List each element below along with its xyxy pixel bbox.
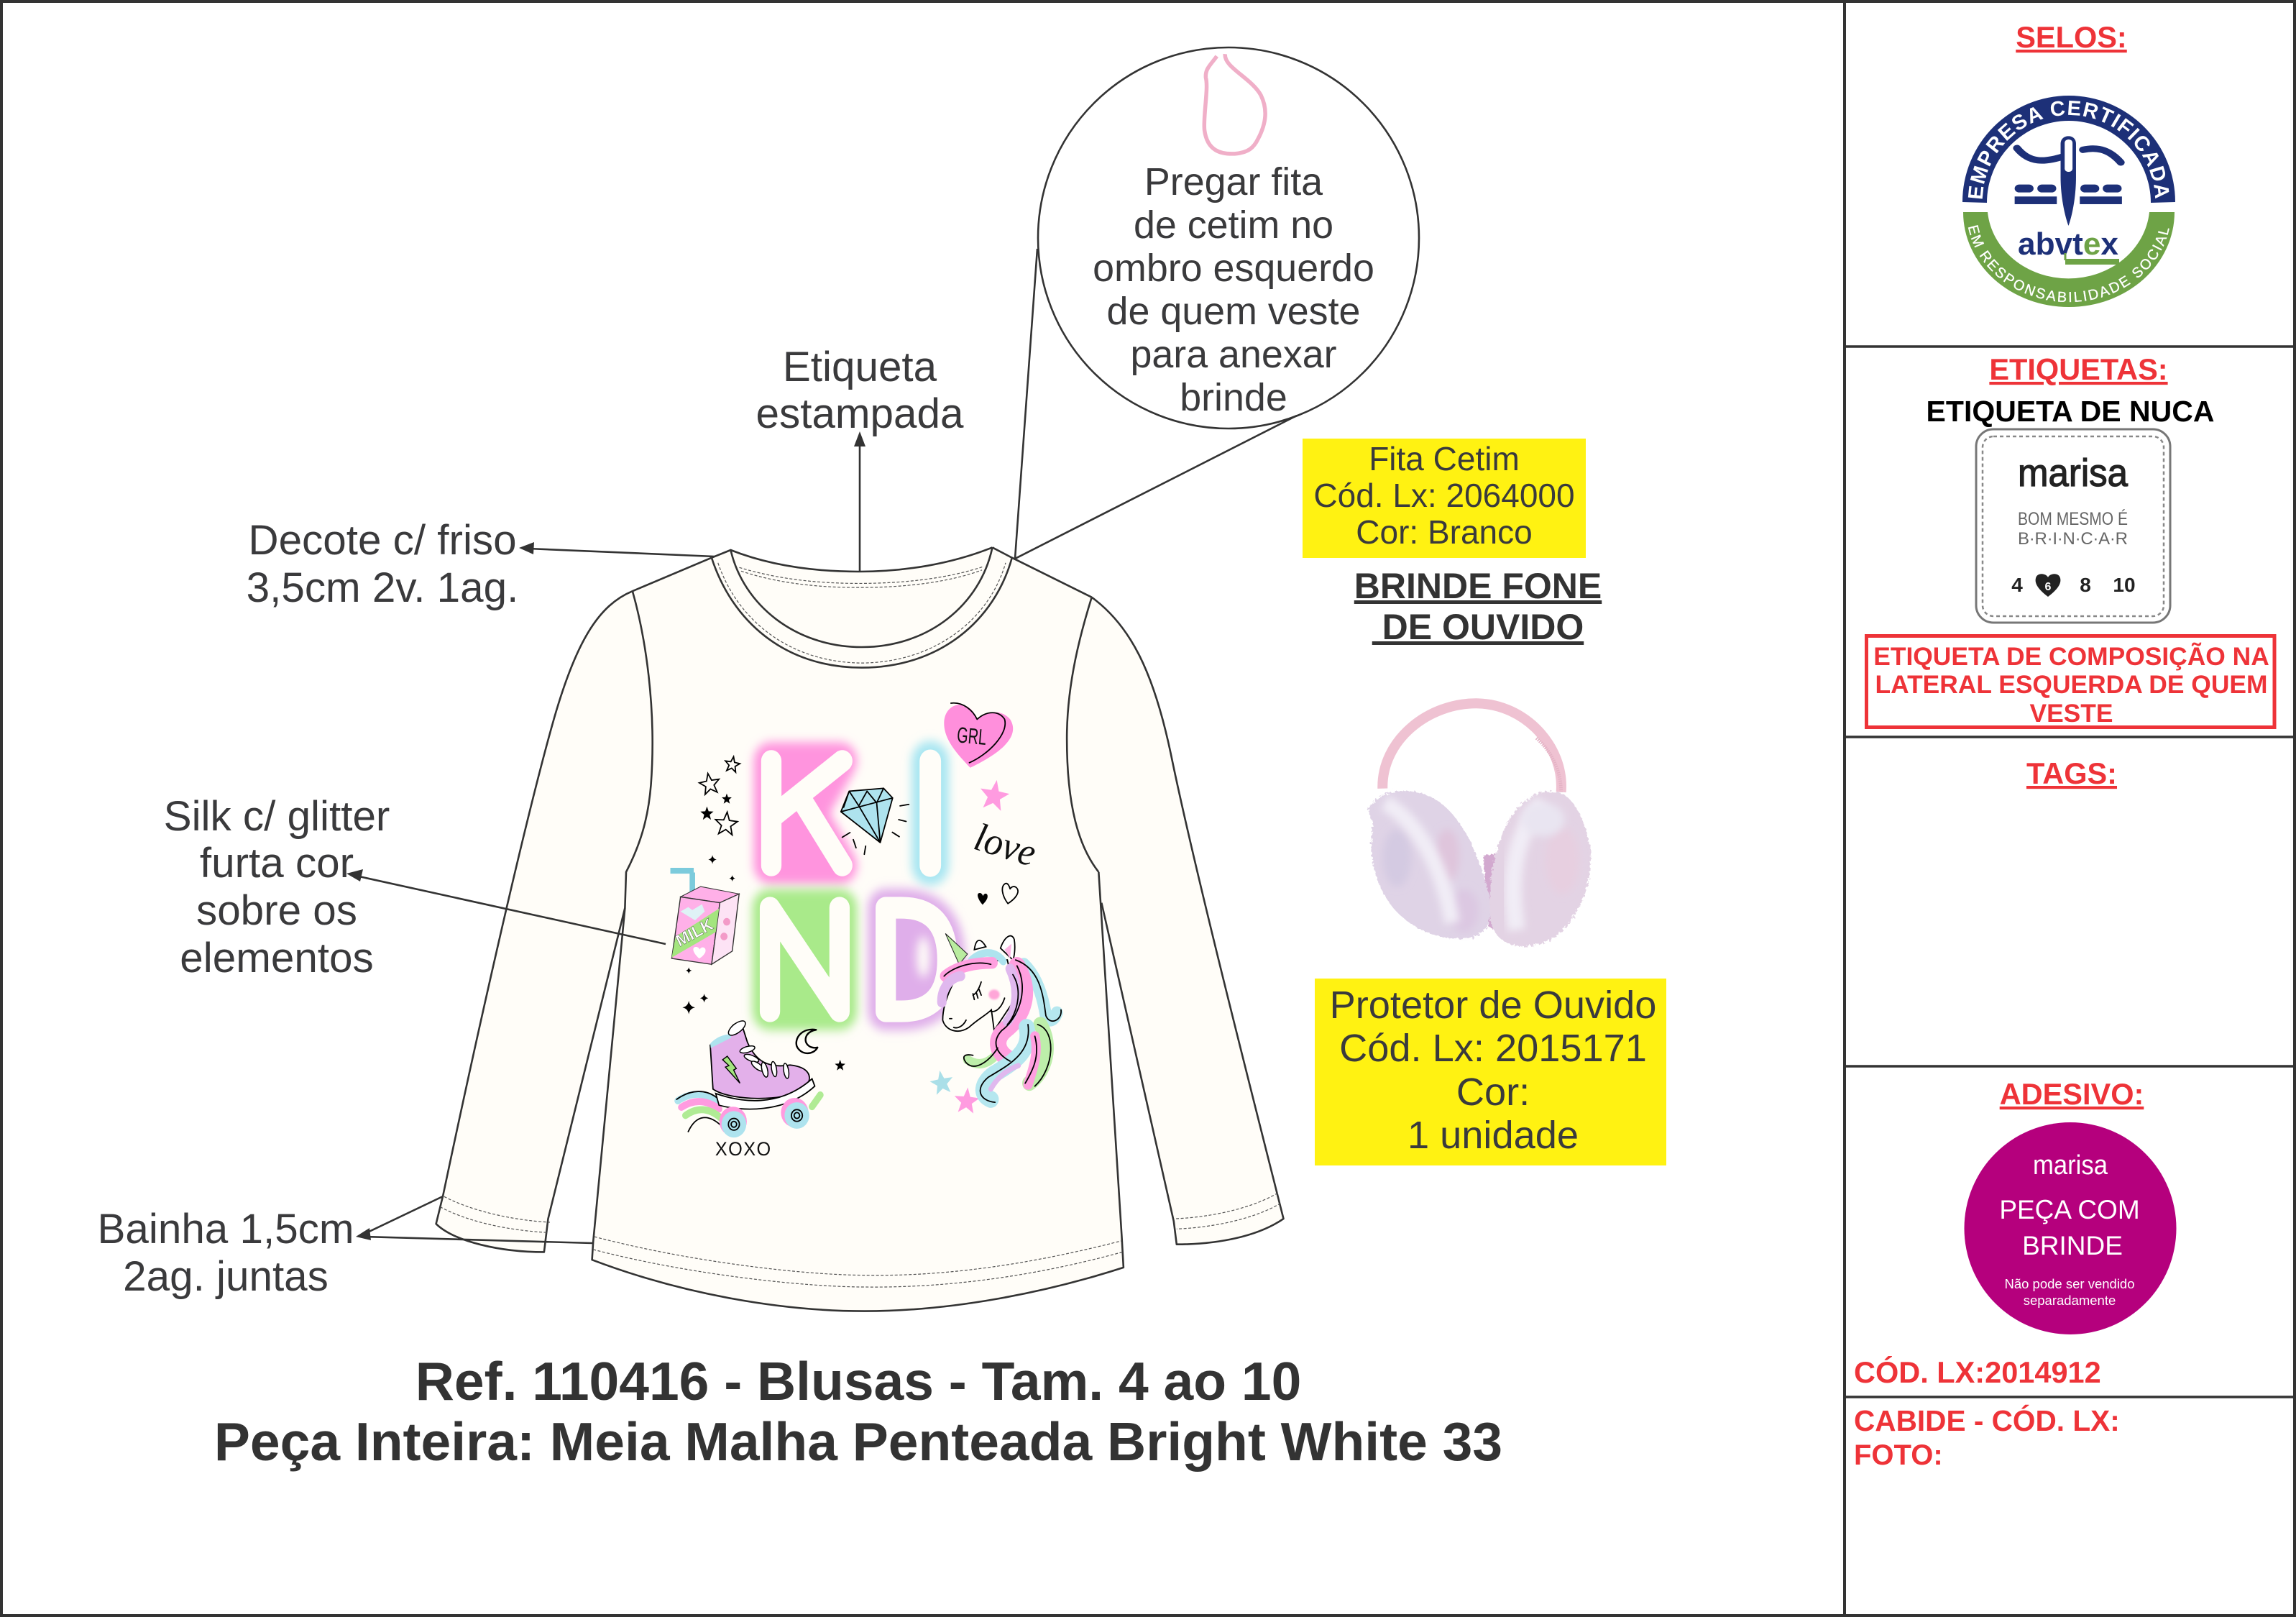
panel: cabide xyxy=(1854,1404,2120,1471)
subheading: etiqueta de nuca: ETIQUETA DE NUCA xyxy=(1927,395,2214,428)
neon letter N xyxy=(770,907,840,1012)
neck label: BOM MESMO É xyxy=(2018,508,2128,529)
composition label note xyxy=(1866,636,2274,728)
sticker: BRINDE xyxy=(2022,1231,2123,1260)
abvtex seal xyxy=(1962,96,2175,307)
shirt outlines xyxy=(436,558,1283,1311)
right ear pad xyxy=(1490,792,1591,946)
satin ribbon loop xyxy=(1204,54,1265,154)
earmuffs photo illustration xyxy=(1368,703,1591,946)
callout text: ombro esquerdo xyxy=(1093,247,1374,290)
sticker xyxy=(1964,1122,2177,1334)
heading: selos: SELOS: xyxy=(2016,20,2127,54)
heart GRL xyxy=(944,703,1013,768)
arrow: silk xyxy=(346,869,666,944)
callout text: para anexar xyxy=(1130,333,1337,376)
label: silk: Silk c/ glitter xyxy=(164,793,390,840)
neon letter K xyxy=(771,761,842,866)
sticker: separadamente xyxy=(2024,1293,2116,1308)
neck label: marisa xyxy=(2018,452,2129,495)
composition label note: LATERAL ESQUERDA DE QUEM xyxy=(1875,670,2267,699)
neck label: B·R·I·N·C·A·R xyxy=(2018,529,2128,549)
neck label: 8 xyxy=(2080,574,2091,596)
arrow: decote xyxy=(519,542,715,556)
xoxo text: XOXO xyxy=(715,1137,771,1160)
roller skate xyxy=(676,1018,820,1137)
composition label note: VESTE xyxy=(2029,699,2113,728)
unicorn xyxy=(942,933,1061,1102)
label: decote: Decote c/ friso xyxy=(248,517,517,564)
label: etiqueta estampada: Etiqueta xyxy=(783,344,937,390)
arrows: bainha xyxy=(356,1196,592,1243)
label: silk: elementos xyxy=(180,935,374,981)
sticker: PEÇA COM xyxy=(1999,1195,2140,1224)
t-shirt flat sketch xyxy=(436,547,1283,1311)
panel: adesivo xyxy=(1854,1077,2177,1389)
neck label: 10 xyxy=(2113,574,2136,596)
label: etiqueta estampada: estampada xyxy=(756,390,964,437)
yellow note: protetor de ouvido: Cor: xyxy=(1456,1071,1530,1114)
abvtex seal: EM RESPONSABILIDADE SOCIAL xyxy=(1968,225,2169,302)
label: etiqueta estampada xyxy=(756,344,964,437)
left ear pad xyxy=(1368,791,1490,939)
arrow: etiqueta estampada xyxy=(854,431,865,572)
panel: cabide: CABIDE - CÓD. LX: xyxy=(1854,1404,2120,1437)
label: decote: 3,5cm 2v. 1ag. xyxy=(247,564,518,611)
diamond xyxy=(841,788,909,854)
KIND print artwork xyxy=(671,703,1061,1160)
needle and stitches xyxy=(2015,136,2122,226)
stars xyxy=(698,756,1011,1114)
panel: cabide: FOTO: xyxy=(1854,1439,1943,1471)
small hearts xyxy=(978,884,1018,904)
callout text xyxy=(1093,160,1374,419)
yellow note: protetor de ouvido: Cód. Lx: 2015171 xyxy=(1339,1027,1647,1070)
love script: love xyxy=(970,814,1041,875)
yellow note: fita cetim: Fita Cetim xyxy=(1369,440,1520,477)
title: Peça Inteira: Meia Malha Penteada Bright White 33 xyxy=(214,1411,1502,1472)
neck label: 4 xyxy=(2011,574,2023,596)
sticker: marisa xyxy=(2033,1150,2108,1181)
neck label: 6 xyxy=(2045,581,2052,593)
neck label xyxy=(1976,429,2170,623)
yellow note: protetor de ouvido: 1 unidade xyxy=(1408,1114,1579,1157)
label: bainha: Bainha 1,5cm xyxy=(97,1206,354,1252)
yellow note: fita cetim: Cor: Branco xyxy=(1356,513,1533,551)
abvtex seal: EMPRESA CERTIFICADA xyxy=(1968,101,2169,198)
callout text: brinde xyxy=(1180,376,1287,419)
title: Ref. 110416 - Blusas - Tam. 4 ao 10 xyxy=(415,1351,1301,1411)
headband xyxy=(1382,703,1561,792)
yellow note: protetor de ouvido xyxy=(1315,979,1666,1165)
heart GRL: GRL xyxy=(956,723,987,750)
yellow note: fita cetim: Cód. Lx: 2064000 xyxy=(1313,477,1575,514)
inner fur xyxy=(1483,853,1497,930)
heading: brinde fone de ouvido: DE OUVIDO xyxy=(1372,607,1584,647)
label: silk: sobre os xyxy=(196,887,357,934)
sticker: Não pode ser vendido xyxy=(2004,1276,2135,1291)
heading: etiquetas: ETIQUETAS: xyxy=(1989,352,2168,386)
panel: etiquetas xyxy=(1866,352,2274,728)
panel: tags heading: TAGS: xyxy=(2026,756,2117,790)
hem stitching xyxy=(440,1193,1280,1287)
milk carton xyxy=(671,871,739,964)
callout text: de cetim no xyxy=(1134,203,1333,247)
shirt silhouette xyxy=(436,547,1283,1311)
neon letter D xyxy=(886,907,947,1012)
title xyxy=(214,1351,1502,1472)
abvtex wordmark: abvtex xyxy=(2018,226,2119,262)
callout text: de quem veste xyxy=(1107,290,1360,333)
neon letter I xyxy=(881,761,979,866)
callout text: Pregar fita xyxy=(1144,160,1323,203)
panel: selos xyxy=(1962,20,2175,307)
milk carton: MILK xyxy=(673,914,716,950)
yellow note: fita cetim xyxy=(1303,439,1586,558)
label: bainha xyxy=(97,1206,354,1300)
label: bainha: 2ag. juntas xyxy=(123,1253,329,1300)
label: decote xyxy=(247,517,518,611)
neckband xyxy=(712,547,1012,668)
sticker code: CÓD. LX:2014912 xyxy=(1854,1355,2101,1389)
heading: adesivo: ADESIVO: xyxy=(2000,1077,2144,1111)
label: silk: furta cor xyxy=(200,840,354,887)
sparkles xyxy=(682,855,735,1014)
heading: brinde fone de ouvido xyxy=(1354,566,1602,647)
callout circle: fita de cetim xyxy=(1015,47,1419,559)
yellow note: protetor de ouvido: Protetor de Ouvido xyxy=(1330,984,1656,1027)
label: silk xyxy=(164,793,390,981)
composition label note: ETIQUETA DE COMPOSIÇÃO NA xyxy=(1873,642,2269,671)
crescent moon xyxy=(796,1030,817,1053)
heading: brinde fone de ouvido: BRINDE FONE xyxy=(1354,566,1602,606)
